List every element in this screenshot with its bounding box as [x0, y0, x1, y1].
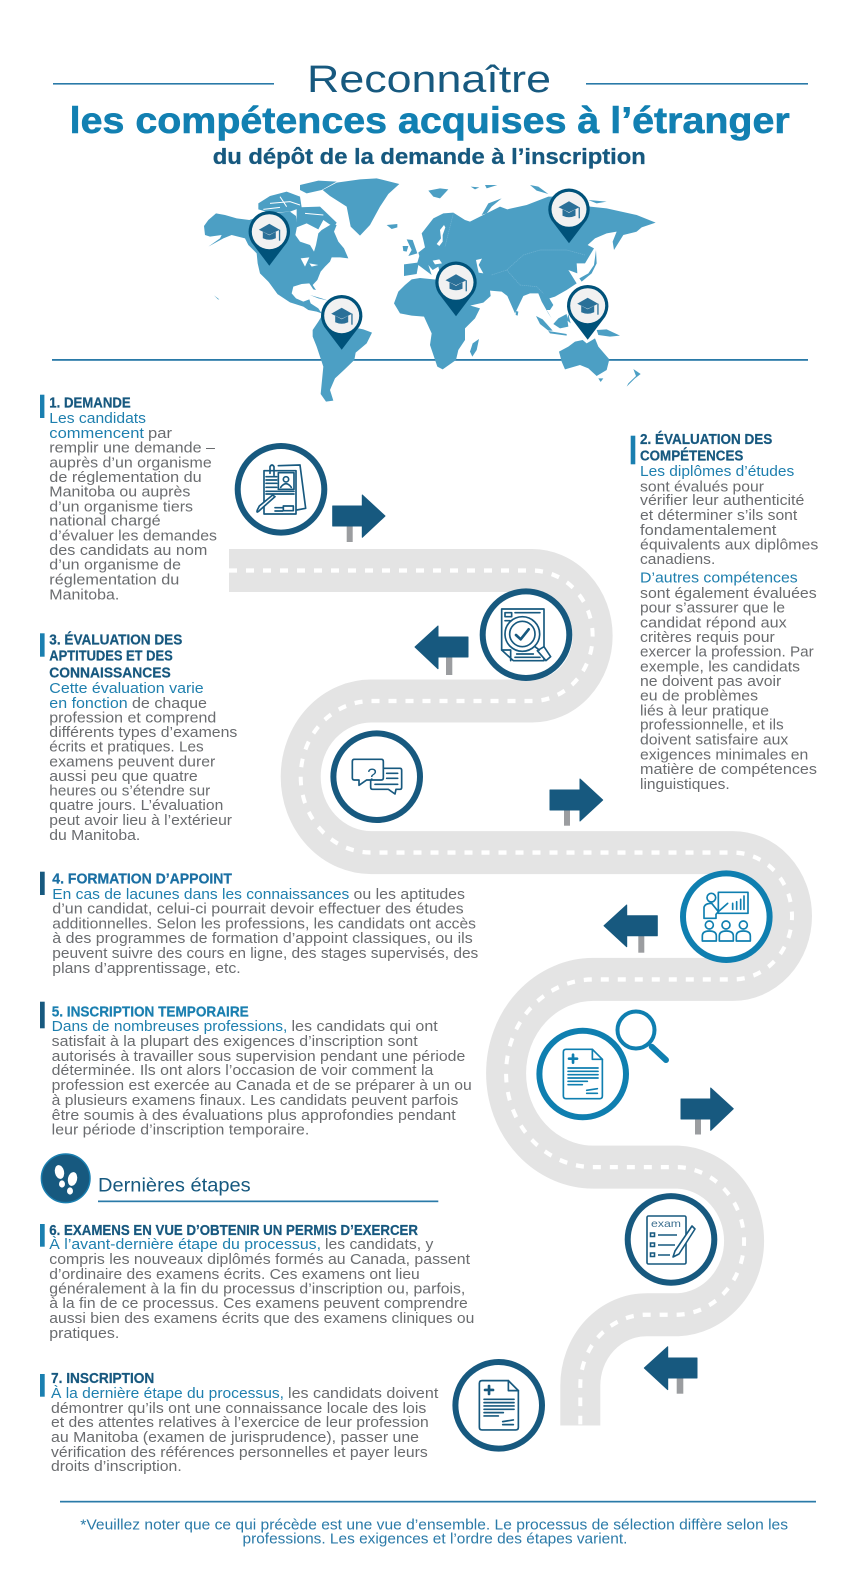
step 5: inscription temporaire: satisfait à la plupart des exigences d’inscription sont: [52, 1033, 419, 1050]
step 2: évaluation des compétences: ne doivent pas avoir: [640, 673, 781, 690]
step 1: demande: Manitoba ou auprès: [49, 484, 190, 501]
step 2: évaluation des compétences: 2. ÉVALUATION DES: [640, 431, 773, 448]
pin: Russia: [548, 189, 590, 243]
icon: document under magnifier: [539, 1012, 666, 1117]
step 2: évaluation des compétences: COMPÉTENCES: [640, 448, 744, 465]
step 1: demande: auprès d’un organisme: [49, 454, 212, 471]
step 4: formation d'appoint: ou les aptitudes: [354, 886, 465, 903]
step 4: formation d'appoint: 4. FORMATION D’APPOINT: [52, 872, 232, 888]
step 3: évaluation des aptitudes et des connaissances: du Manitoba.: [49, 827, 140, 844]
step 2: évaluation des compétences: D’autres compétences: [640, 570, 798, 587]
step 1: demande: des candidats au nom: [49, 542, 207, 559]
icon: classroom training: [683, 873, 770, 960]
step 2: évaluation des compétences: linguistiques.: [640, 776, 730, 793]
step 7: inscription: [40, 1371, 439, 1475]
icon: speech bubbles: [333, 733, 420, 820]
icon: speech bubbles: ?: [367, 765, 377, 784]
title: Reconnaître: [307, 59, 551, 101]
step 1: demande: réglementation du: [49, 571, 179, 588]
step 7: inscription: démontrer qu’ils ont une connaissance locale des lois: [51, 1400, 426, 1417]
step 2: évaluation des compétences: Les diplômes d’études: [640, 463, 794, 480]
step 5: inscription temporaire: profession est exercée au Canada et de se préparer à un ou: [52, 1077, 472, 1094]
step 5: inscription temporaire: déterminée. Ils ont alors l’occasion de voir comment la: [52, 1062, 434, 1079]
step 5: inscription temporaire: autorisés à travailler sous supervision pendant une période: [52, 1048, 465, 1065]
step 2: évaluation des compétences: fondamentalement: [640, 522, 777, 539]
step 1: demande: Manitoba.: [49, 586, 119, 603]
step 1: demande: 1. DEMANDE: [49, 396, 131, 412]
step 2: évaluation des compétences: vérifier leur authenticité: [640, 492, 804, 509]
step 5: inscription temporaire: les candidats qui ont: [292, 1018, 439, 1035]
step 2: évaluation des compétences: [631, 431, 818, 793]
step 5: inscription temporaire: être soumis à des évaluations plus approfondies pendant: [52, 1107, 457, 1124]
step 7: inscription: vérification des références personnelles et payer leurs: [51, 1444, 428, 1461]
step 2: évaluation des compétences: exigences minimales en: [640, 747, 808, 764]
step 3: évaluation des aptitudes et des connaissances: de chaque: [132, 695, 207, 712]
winding road: [229, 571, 792, 1425]
step 2: évaluation des compétences: liés à leur pratique: [640, 703, 769, 720]
pin: North America: [249, 211, 290, 266]
arrow: right 5: [681, 1088, 733, 1134]
step 2: évaluation des compétences: candidat répond aux: [640, 614, 787, 631]
title: du dépôt de la demande à l’inscription: [213, 144, 646, 169]
step 7: inscription: au Manitoba (examen de jurisprudence), passer une: [51, 1429, 419, 1446]
step 3: évaluation des aptitudes et des connaissances: CONNAISSANCES: [49, 665, 171, 681]
step 5: inscription temporaire: 5. INSCRIPTION TEMPORAIRE: [52, 1005, 249, 1021]
step 7: inscription: 7. INSCRIPTION: [51, 1371, 154, 1387]
step 4: formation d'appoint: d’un candidat, celui-ci pourrait devoir effectuer des études: [52, 901, 464, 918]
step 7: inscription: les candidats doivent: [288, 1385, 439, 1402]
step 3: évaluation des aptitudes et des connaissances: heures ou s’étendre sur: [49, 783, 210, 800]
step 1: demande: Les candidats: [49, 410, 146, 427]
step 3: évaluation des aptitudes et des connaissances: [40, 631, 237, 844]
step 3: évaluation des aptitudes et des connaissances: différents types d’examens: [49, 724, 237, 741]
heading: dernières étapes with footprints icon: Dernières étapes: [98, 1175, 251, 1197]
step 2: évaluation des compétences: professionnelle, et ils: [640, 717, 784, 734]
step 7: inscription: droits d’inscription.: [51, 1458, 182, 1475]
step 4: formation d'appoint: plans d’apprentissage, etc.: [52, 960, 241, 977]
step 1: demande: commencent: [49, 425, 145, 442]
arrow: left 4: [604, 905, 657, 953]
step 4: formation d'appoint: En cas de lacunes dans les connaissances: [52, 886, 349, 903]
icon: exam sheet: [628, 1196, 714, 1283]
step 2: évaluation des compétences: et déterminer s’ils sont: [640, 507, 798, 524]
step 5: inscription temporaire: [40, 1002, 472, 1138]
step 6: examens: aussi bien des examens écrits que des examens cliniques ou: [49, 1310, 474, 1327]
step 5: inscription temporaire: leur période d’inscription temporaire.: [52, 1121, 309, 1138]
step 4: formation d'appoint: [40, 872, 478, 977]
step 2: évaluation des compétences: canadiens.: [640, 551, 715, 568]
icon: exam sheet: exam: [651, 1218, 681, 1230]
icon: registration document: [455, 1362, 542, 1449]
step 3: évaluation des aptitudes et des connaissances: en fonction: [49, 695, 128, 712]
step 2: évaluation des compétences: exemple, les candidats: [640, 659, 800, 676]
world map: [204, 178, 656, 402]
step 3: évaluation des aptitudes et des connaissances: profession et comprend: [49, 709, 216, 726]
step 3: évaluation des aptitudes et des connaissances: écrits et pratiques. Les: [49, 739, 204, 756]
arrow: right 1: [333, 495, 385, 542]
step 2: évaluation des compétences: sont évalués pour: [640, 478, 764, 495]
step 2: évaluation des compétences: matière de compétences: [640, 761, 817, 778]
step 2: évaluation des compétences: pour s’assurer que le: [640, 600, 785, 617]
step 1: demande: remplir une demande –: [49, 440, 216, 457]
step 3: évaluation des aptitudes et des connaissances: Cette évaluation varie: [49, 680, 204, 697]
step 6: examens: compris les nouveaux diplômés formés au Canada, passent: [49, 1251, 471, 1268]
step 3: évaluation des aptitudes et des connaissances: APTITUDES ET DES: [49, 649, 173, 665]
step 6: examens: les candidats, y: [325, 1236, 434, 1253]
step 3: évaluation des aptitudes et des connaissances: 3. ÉVALUATION DES: [49, 631, 183, 648]
pin: South America: [321, 295, 362, 350]
step 1: demande: d’évaluer les demandes: [49, 527, 217, 544]
step 6: examens: [40, 1223, 474, 1342]
footer note: [60, 1501, 816, 1547]
step 2: évaluation des compétences: équivalents aux diplômes: [640, 536, 818, 553]
step 7: inscription: À la dernière étape du processus,: [51, 1385, 284, 1402]
arrow: left 6: [644, 1347, 697, 1394]
heading: dernières étapes with footprints icon: [41, 1154, 438, 1203]
title: les compétences acquises à l’étranger: [70, 100, 790, 141]
step 5: inscription temporaire: à plusieurs examens finaux. Les candidats peuvent parfois: [52, 1092, 458, 1109]
step 2: évaluation des compétences: critères requis pour: [640, 629, 775, 646]
step 1: demande: national chargé: [49, 513, 161, 530]
step 6: examens: pratiques.: [49, 1325, 119, 1342]
step 2: évaluation des compétences: eu de problèmes: [640, 688, 758, 705]
step 1: demande: [40, 395, 217, 603]
arrow: right 3: [550, 779, 603, 826]
step 5: inscription temporaire: Dans de nombreuses professions,: [52, 1018, 287, 1035]
step 1: demande: d’un organisme de: [49, 557, 181, 574]
step 2: évaluation des compétences: sont également évaluées: [640, 585, 817, 602]
step 2: évaluation des compétences: doivent satisfaire aux: [640, 732, 789, 749]
step 4: formation d'appoint: additionnelles. Selon les professions, les candidats ont accès: [52, 916, 476, 933]
step 6: examens: généralement à la fin du processus d’inscription ou, parfois,: [49, 1280, 465, 1297]
icon: application form: [238, 446, 324, 533]
icon: credentials check: [483, 591, 569, 678]
footer note: professions. Les exigences et l’ordre des étapes varient.: [242, 1531, 627, 1547]
step 2: évaluation des compétences: exercer la profession. Par: [640, 644, 814, 661]
step 4: formation d'appoint: à des programmes de formation d’appoint classiques, ou ils: [52, 930, 473, 947]
step 1: demande: d’un organisme tiers: [49, 498, 193, 515]
step 3: évaluation des aptitudes et des connaissances: examens peuvent durer: [49, 753, 215, 770]
step 1: demande: de réglementation du: [49, 469, 202, 486]
step 1: demande: par: [148, 425, 172, 442]
pin: Africa: [435, 262, 477, 316]
step 6: examens: à la fin de ce processus. Ces examens peuvent comprendre: [49, 1295, 468, 1312]
step 7: inscription: et des attentes relatives à l’exercice de leur profession: [51, 1414, 429, 1431]
step 6: examens: 6. EXAMENS EN VUE D’OBTENIR UN PERMIS D’EXERCER: [49, 1223, 419, 1239]
footer note: *Veuillez noter que ce qui précède est une vue d’ensemble. Le processus de sélection diffère selon les: [80, 1517, 788, 1533]
step 3: évaluation des aptitudes et des connaissances: quatre jours. L’évaluation: [49, 797, 223, 814]
arrow: left 2: [415, 626, 468, 675]
step 3: évaluation des aptitudes et des connaissances: aussi peu que quatre: [49, 768, 198, 785]
step 4: formation d'appoint: peuvent suivre des cours en ligne, des stages supervisés, des: [52, 945, 478, 962]
pin: South-East Asia: [567, 285, 608, 340]
step 6: examens: À l’avant-dernière étape du processus,: [49, 1236, 321, 1253]
step 6: examens: d’ordinaire des examens écrits. Ces examens ont lieu: [49, 1266, 420, 1283]
title: [53, 59, 808, 169]
step 3: évaluation des aptitudes et des connaissances: peut avoir lieu à l’extérieur: [49, 812, 232, 829]
